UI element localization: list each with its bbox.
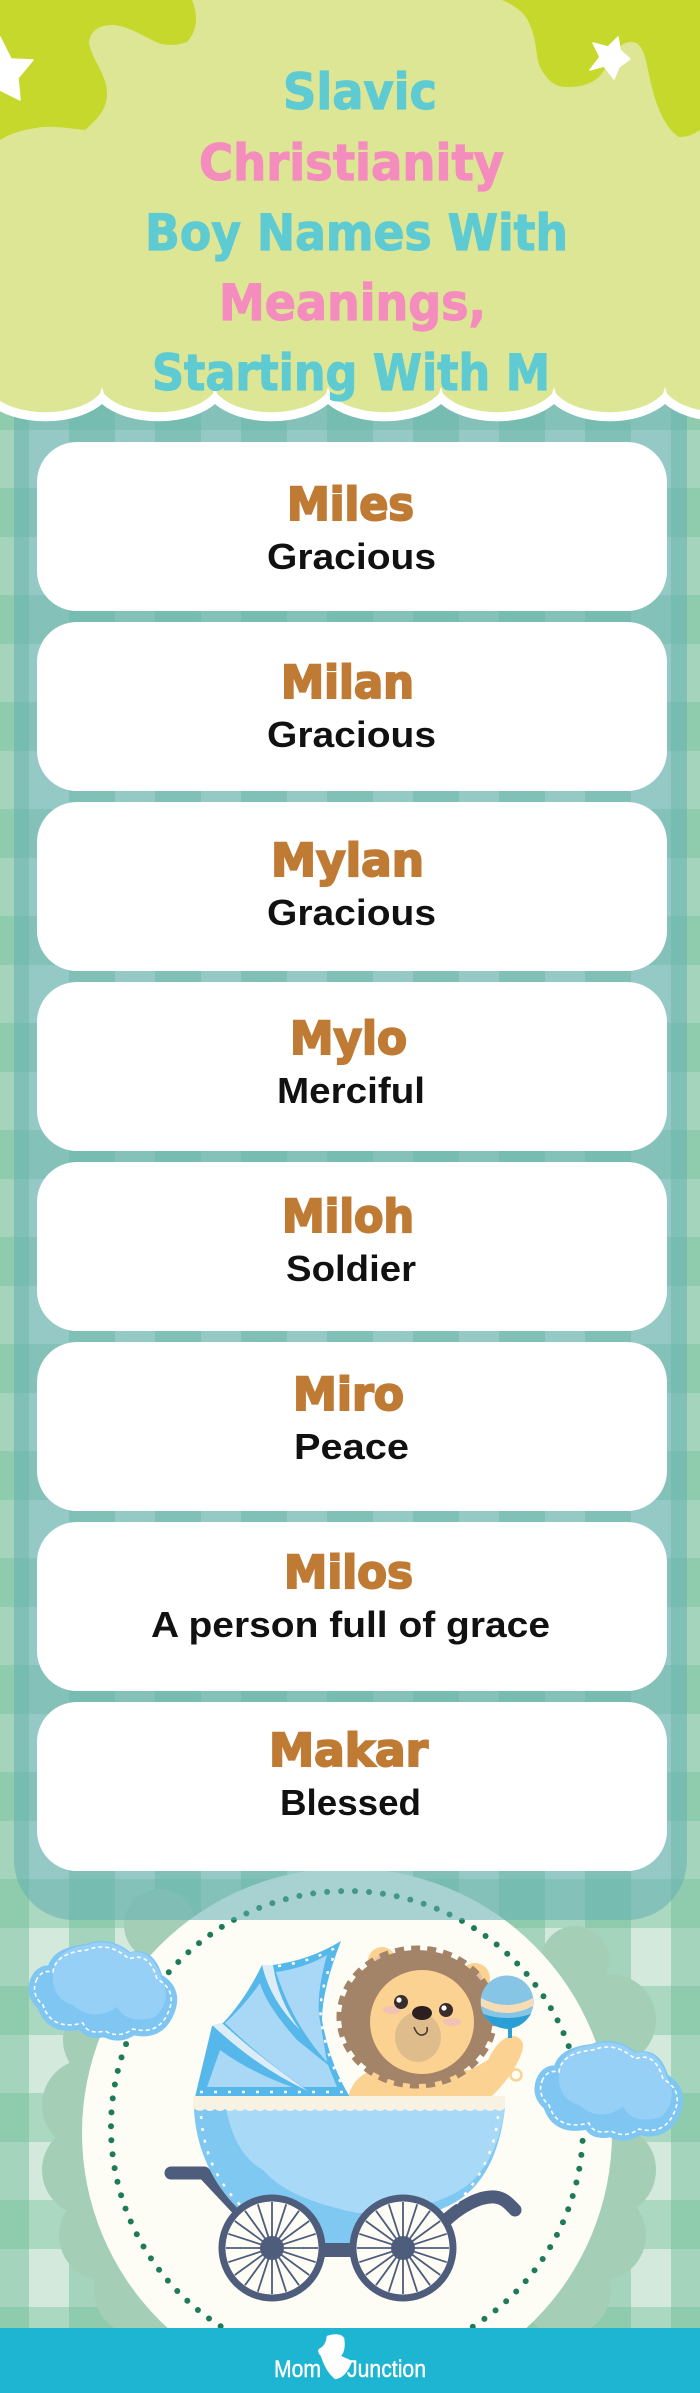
card: Miro: Peace [294, 1426, 409, 1467]
header with scalloped edge [0, 0, 700, 417]
right wheel [353, 2198, 453, 2298]
card: Miloh: Miloh [282, 1190, 414, 1243]
card: Milan: Gracious [267, 714, 436, 755]
card: Miles: Gracious [267, 536, 436, 577]
icon: right cloud [541, 2042, 677, 2135]
card: Miro: Miro [293, 1368, 404, 1421]
lion mane [340, 1949, 494, 2085]
logo: MomJunction [274, 2334, 426, 2383]
card: Miles [37, 442, 667, 611]
card: Miro [37, 1342, 667, 1511]
rattle [480, 1976, 534, 2080]
card: Milos: A person full of grace [151, 1604, 550, 1645]
stroller axle [320, 2243, 356, 2257]
lion face [370, 1970, 474, 2074]
card: Makar [37, 1702, 667, 1871]
footer bar [0, 2328, 700, 2393]
scalloped green shape behind circle [42, 1889, 661, 2336]
card: Makar: Blessed [280, 1782, 421, 1823]
icon: baby stroller [171, 1941, 515, 2298]
lime blob: top right [502, 0, 700, 137]
lion ears [368, 1947, 490, 1993]
card: Miloh [37, 1162, 667, 1331]
title: Christianity [199, 134, 504, 192]
card: Milos: Milos [284, 1546, 413, 1599]
lion body and arm [348, 2036, 523, 2098]
card: Mylan: Mylan [271, 834, 424, 887]
card: Mylan: Gracious [267, 892, 436, 933]
card: Miles: Miles [287, 478, 414, 531]
left wheel [222, 2198, 322, 2298]
title [145, 63, 568, 402]
stroller basket [193, 2096, 505, 2247]
icon: left cloud [35, 1942, 171, 2035]
card: Milan [37, 622, 667, 791]
icon: lion with rattle [340, 1947, 534, 2098]
lime blob: top left [0, 0, 196, 140]
logo: MomJunction: Junction [347, 2356, 426, 2383]
card: Mylo: Mylo [290, 1012, 407, 1065]
title: Starting With M [152, 344, 550, 402]
icon: star left [0, 37, 33, 100]
card: Miloh: Soldier [286, 1248, 416, 1289]
card: Milos [37, 1522, 667, 1691]
title: Slavic [283, 63, 437, 121]
stroller hood [195, 1941, 350, 2097]
logo: MomJunction: Mom [274, 2356, 321, 2383]
title: Boy Names With [145, 204, 568, 262]
card: Mylan [37, 802, 667, 971]
card: Mylo [37, 982, 667, 1151]
name cards [37, 442, 667, 1871]
icon: star right [590, 37, 630, 79]
teal panel [14, 300, 687, 1920]
card: Mylo: Merciful [277, 1070, 425, 1111]
title: Meanings, [219, 274, 486, 332]
dotted circle [111, 1891, 583, 2363]
white circle [82, 1868, 612, 2393]
logo icon [318, 2334, 352, 2379]
card: Makar: Makar [269, 1724, 429, 1777]
stroller handle and rear frame [171, 2173, 515, 2224]
card: Milan: Milan [281, 656, 414, 709]
